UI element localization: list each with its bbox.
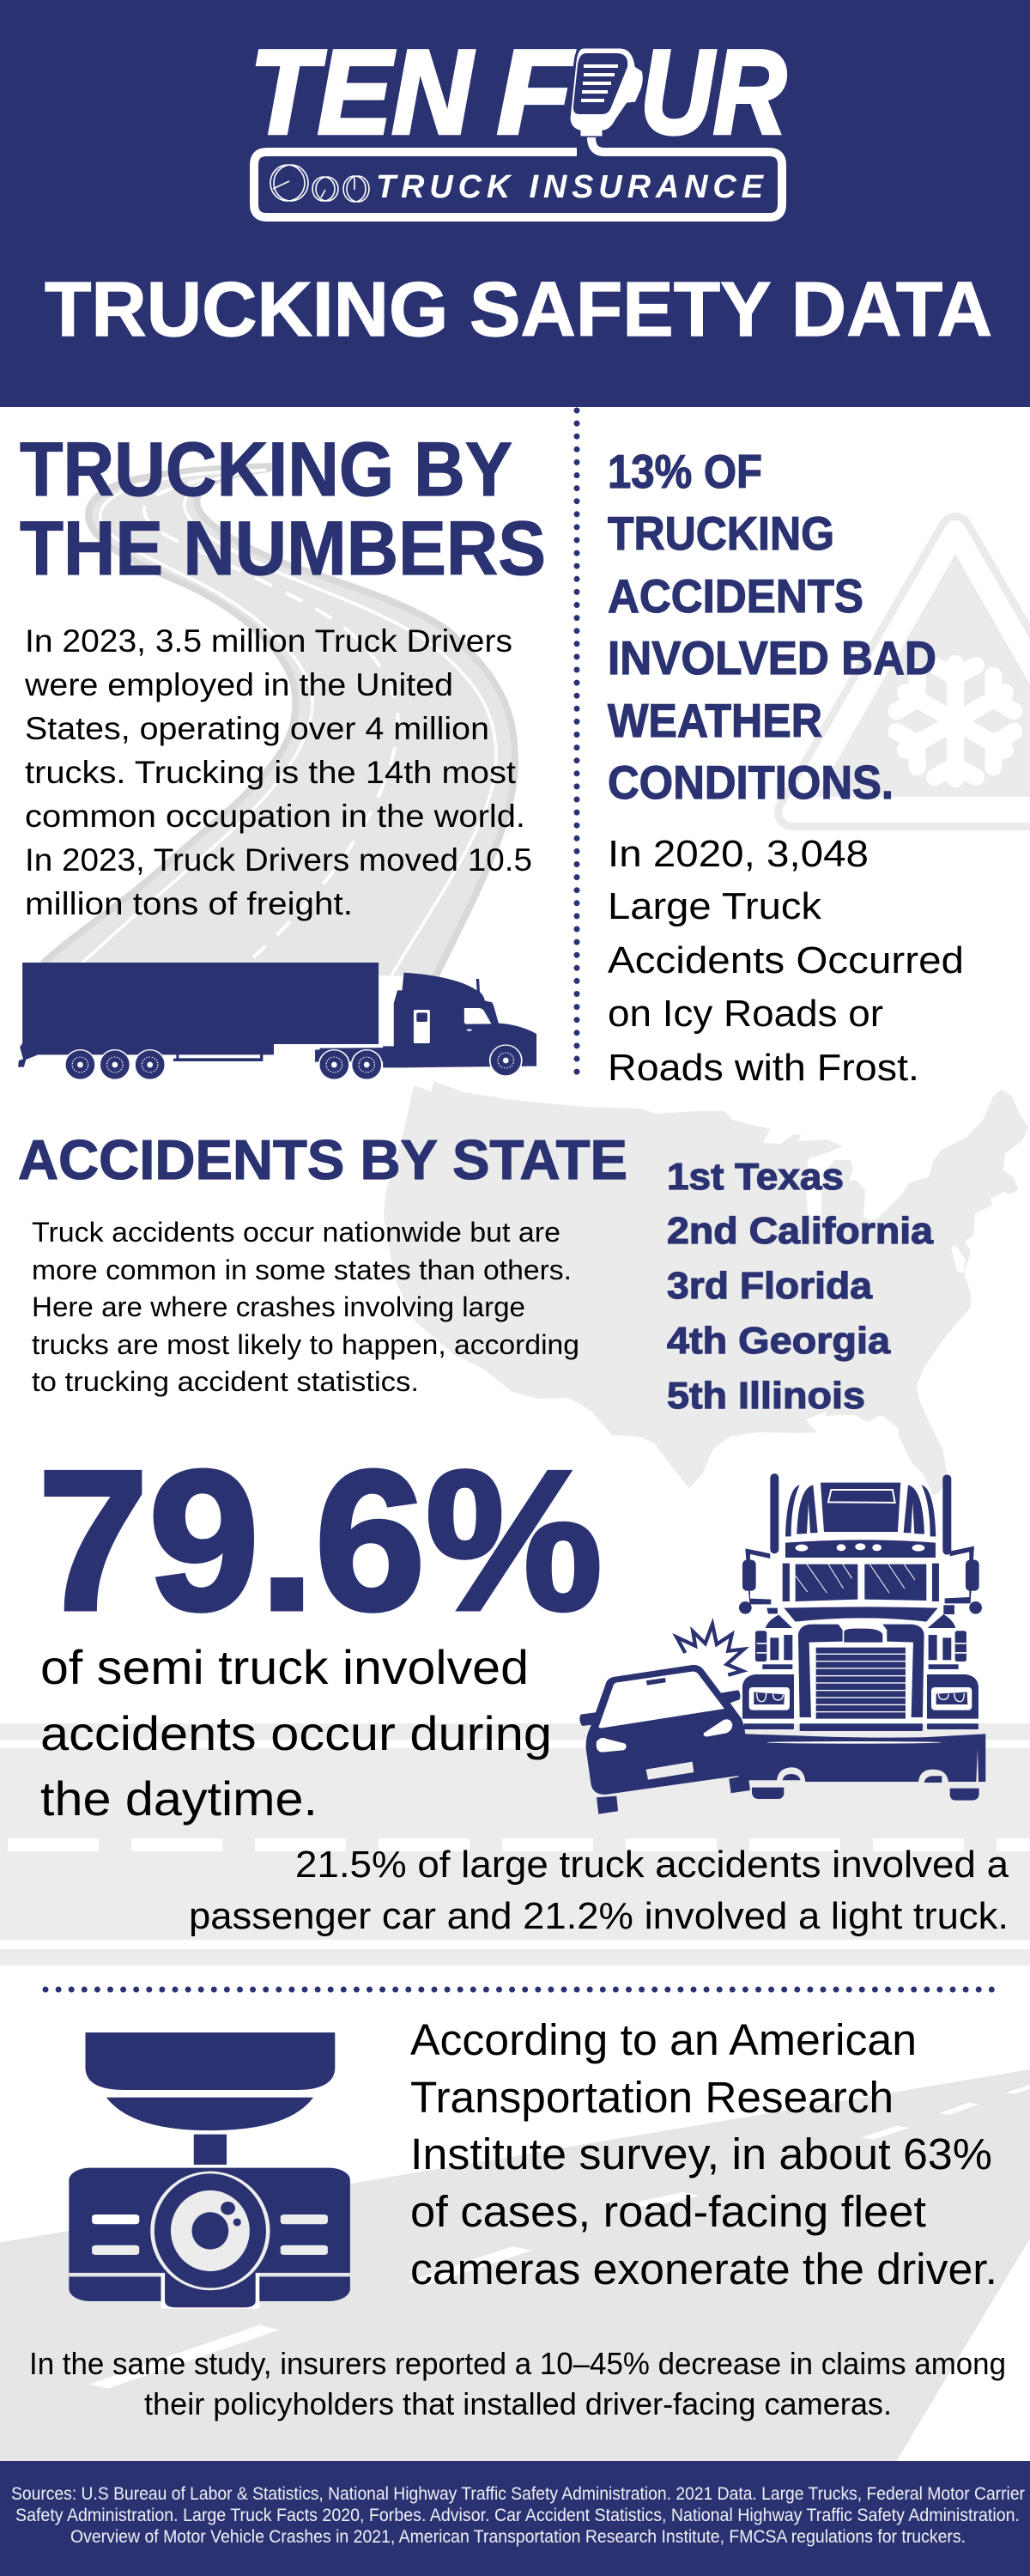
header panel bbox=[0, 0, 1030, 407]
heading: TRUCKING bbox=[608, 507, 834, 560]
state ranking list: 2nd California bbox=[667, 1210, 934, 1252]
panel: daytime accidents bbox=[38, 1430, 1009, 1937]
state ranking list: 4th Georgia bbox=[667, 1320, 891, 1362]
text block: insurers: In the same study, insurers reported a 10–45% decrease in claims among bbox=[29, 2346, 1006, 2381]
heading: ACCIDENTS BY STATE bbox=[18, 1128, 627, 1191]
icon: gauges bbox=[270, 165, 369, 202]
icon: radio microphone bbox=[569, 47, 644, 137]
panel: trucking by the numbers bbox=[18, 426, 546, 1079]
text block: were employed in the United bbox=[24, 667, 453, 702]
text block bbox=[608, 833, 964, 1089]
panel: fleet cameras bbox=[29, 2015, 1006, 2421]
panel: accidents by state bbox=[18, 1128, 934, 1417]
text block: survey: of cases, road-facing fleet bbox=[410, 2187, 926, 2236]
text block bbox=[32, 1217, 579, 1397]
logo tagline: TRUCK INSURANCE bbox=[376, 169, 765, 205]
text block: Accidents Occurred bbox=[608, 939, 964, 981]
background: horizontal highway bbox=[0, 1723, 1030, 1965]
text block: insurers bbox=[29, 2346, 1006, 2421]
footer: sources bbox=[0, 2461, 1030, 2576]
logo wordmark: TEN bbox=[250, 26, 474, 159]
icon: truck and car collision bbox=[579, 1473, 985, 1814]
heading: THE NUMBERS bbox=[20, 505, 546, 591]
big stat: 79.6% bbox=[38, 1430, 603, 1652]
heading: CONDITIONS. bbox=[608, 756, 894, 809]
text block: to trucking accident statistics. bbox=[32, 1366, 419, 1397]
text block: vehicle types bbox=[189, 1844, 1009, 1937]
text block: survey: According to an American bbox=[410, 2015, 917, 2064]
text block: common occupation in the world. bbox=[25, 799, 525, 834]
text block: survey bbox=[410, 2015, 997, 2293]
text block: trucks are most likely to happen, according bbox=[32, 1329, 579, 1360]
text block: of semi truck involved bbox=[40, 1640, 529, 1694]
background: USA map silhouette bbox=[385, 1082, 1027, 1494]
logo wordmark: F bbox=[497, 26, 574, 159]
state ranking list: 1st Texas bbox=[667, 1156, 844, 1198]
text block: survey: Institute survey, in about 63% bbox=[410, 2129, 992, 2178]
icon: dash camera bbox=[69, 2032, 350, 2309]
state ranking list bbox=[667, 1156, 934, 1417]
icon: semi truck side view bbox=[18, 963, 536, 1079]
text block: trucks. Trucking is the 14th most bbox=[25, 755, 517, 790]
logo wordmark: UR bbox=[640, 26, 786, 159]
text block: survey: Transportation Research bbox=[410, 2073, 894, 2122]
text block: more common in some states than others. bbox=[32, 1255, 572, 1285]
text block: the daytime. bbox=[40, 1771, 318, 1826]
state ranking list: 5th Illinois bbox=[667, 1375, 865, 1417]
text block: Here are where crashes involving large bbox=[32, 1291, 525, 1322]
heading: 13% OF bbox=[608, 445, 762, 498]
text block: on Icy Roads or bbox=[608, 993, 883, 1035]
logo wordmark bbox=[250, 26, 786, 159]
background: winding road bbox=[43, 466, 515, 977]
text block: vehicle types: 21.5% of large truck accidents involved a bbox=[295, 1844, 1009, 1886]
logo: Ten Four Truck Insurance bbox=[250, 26, 786, 217]
heading bbox=[608, 445, 936, 809]
heading: WEATHER bbox=[608, 694, 822, 747]
text block: Truck accidents occur nationwide but are bbox=[32, 1217, 560, 1248]
text block: Large Truck bbox=[608, 885, 822, 927]
text block: vehicle types: passenger car and 21.2% involved a light truck. bbox=[189, 1895, 1009, 1937]
background: snow warning triangle bbox=[792, 531, 1030, 812]
text block: Roads with Frost. bbox=[608, 1047, 919, 1089]
text block: million tons of freight. bbox=[25, 886, 353, 921]
state ranking list: 3rd Florida bbox=[667, 1265, 873, 1307]
text block bbox=[24, 623, 532, 921]
text block: accidents occur during bbox=[40, 1706, 552, 1760]
text block: survey: cameras exonerate the driver. bbox=[410, 2245, 997, 2293]
text block: In 2023, 3.5 million Truck Drivers bbox=[25, 623, 512, 659]
text block: In 2023, Truck Drivers moved 10.5 bbox=[25, 842, 532, 878]
title: TRUCKING SAFETY DATA bbox=[45, 267, 992, 353]
heading: INVOLVED BAD bbox=[608, 631, 936, 684]
footer: sources: Overview of Motor Vehicle Crashes in 2021, American Transportation Research Institute, FMCSA regulations for truckers. bbox=[70, 2527, 966, 2547]
heading: TRUCKING BY bbox=[20, 426, 512, 512]
text block: In 2020, 3,048 bbox=[608, 833, 869, 875]
text block bbox=[40, 1640, 552, 1826]
text block: insurers: their policyholders that installed driver-facing cameras. bbox=[144, 2386, 892, 2421]
heading bbox=[20, 426, 546, 591]
heading: ACCIDENTS bbox=[608, 569, 863, 623]
background: diagonal road bbox=[0, 2069, 1030, 2461]
logo cord frame bbox=[254, 137, 782, 217]
text block: States, operating over 4 million bbox=[25, 711, 489, 746]
panel: bad weather bbox=[608, 445, 964, 1089]
